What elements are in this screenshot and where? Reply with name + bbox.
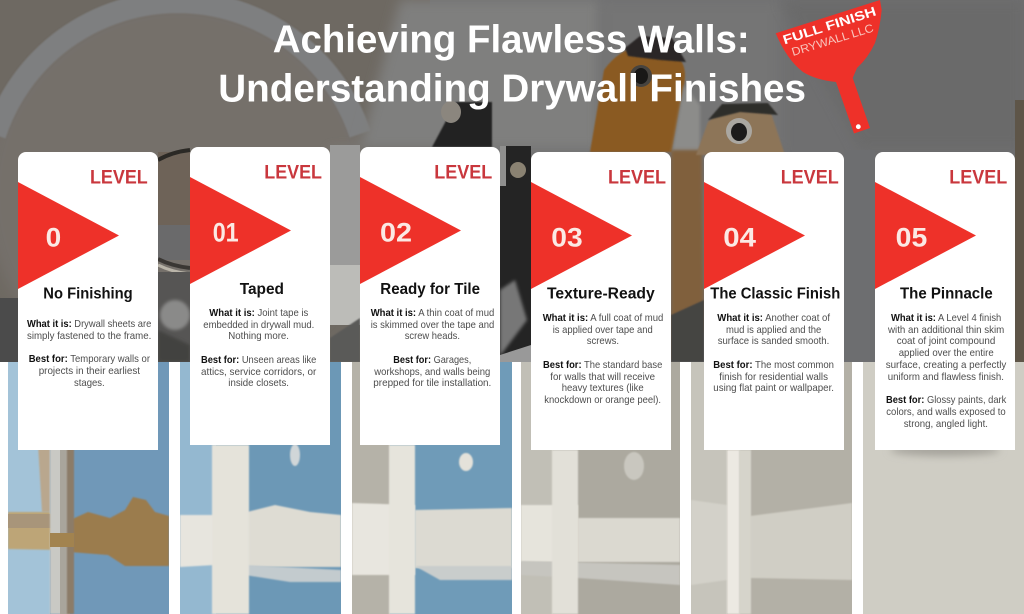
title (218, 18, 806, 111)
level label: LEVEL (90, 168, 148, 189)
description: is skimmed over the tape and (371, 320, 494, 331)
panel: level 03 (531, 152, 671, 450)
description: heavy textures (like (562, 383, 644, 394)
panel: level 0 (18, 152, 158, 450)
level number: 02 (380, 218, 412, 248)
logo: Full Finish Drywall trowel (776, 0, 882, 134)
black trowel handle (432, 102, 492, 147)
logo: Full Finish Drywall trowel: FULL FINISH (781, 4, 878, 47)
panel: level 01 (190, 147, 330, 445)
level label: LEVEL (781, 168, 839, 189)
level number: 0 (46, 223, 61, 253)
description (713, 313, 834, 394)
red triangle (360, 177, 461, 284)
description: uniform and flawless finish. (888, 372, 1004, 383)
description (886, 313, 1007, 430)
description: What it is: A thin coat of mud (371, 308, 494, 319)
photo strip: level 2 ready for tile (352, 362, 512, 614)
description: finish for residential walls (719, 372, 828, 383)
level label: LEVEL (434, 163, 493, 184)
description: for walls that will receive (550, 372, 655, 383)
description: using flat paint or wallpaper. (713, 383, 834, 394)
description (201, 308, 317, 389)
description: workshops, and walls being (373, 367, 490, 378)
level number: 04 (723, 223, 756, 253)
photo strip: level 1 taped (180, 362, 341, 614)
level number: 03 (551, 223, 583, 253)
level label: LEVEL (949, 168, 1008, 189)
photo strip: level 0 bare drywall (8, 362, 169, 614)
description: What it is: Joint tape is (209, 308, 308, 319)
heading: Texture-Ready (547, 286, 655, 302)
description: What it is: Drywall sheets are (27, 319, 151, 330)
level label: LEVEL (608, 168, 666, 189)
level number: 01 (213, 218, 239, 248)
description: attics, service corridors, or (201, 367, 317, 378)
panel: level 02 (360, 147, 500, 445)
red triangle (875, 182, 976, 289)
description: surface, creating a perfectly (886, 360, 1007, 371)
red triangle (531, 182, 632, 289)
description: screws. (587, 336, 619, 347)
description: Nothing more. (228, 331, 289, 342)
description: Best for: Temporary walls or (29, 354, 150, 365)
description: projects in their earliest (39, 366, 140, 377)
description: Best for: The standard base (543, 360, 662, 371)
description: coat of joint compound (897, 336, 995, 347)
description: What it is: A Level 4 finish (891, 313, 1001, 324)
description: inside closets. (228, 378, 289, 389)
description: knockdown or orange peel). (544, 395, 661, 406)
photo strip: level 4 classic finish (691, 362, 852, 614)
description: What it is: Another coat of (717, 313, 830, 324)
heading: The Pinnacle (900, 286, 993, 302)
level label: LEVEL (264, 163, 322, 184)
description: simply fastened to the frame. (27, 331, 151, 342)
description: stages. (74, 378, 105, 389)
heading: Ready for Tile (380, 281, 480, 298)
title: Achieving Flawless Walls: (273, 18, 750, 61)
description: What it is: A full coat of mud (543, 313, 663, 324)
description (371, 308, 494, 389)
description: Best for: Unseen areas like (201, 355, 316, 366)
photo strip: level 5 pinnacle (863, 362, 1024, 614)
description: colors, and walls exposed to (886, 407, 1006, 418)
description: mud is applied and the (726, 325, 821, 336)
description (27, 319, 151, 389)
description: is applied over tape and (553, 325, 653, 336)
description: prepped for tile installation. (373, 378, 491, 389)
description: Best for: The most common (713, 360, 834, 371)
photo strip: level 3 texture-ready (521, 362, 680, 614)
heading: No Finishing (43, 286, 133, 302)
panel: level 05 (875, 152, 1015, 456)
level number: 05 (896, 223, 927, 253)
heading: Taped (240, 281, 284, 298)
title: Understanding Drywall Finishes (218, 68, 806, 111)
red triangle (190, 177, 291, 284)
description: Best for: Garages, (393, 355, 471, 366)
description: surface is sanded smooth. (718, 336, 829, 347)
description: with an additional thin skim (887, 325, 1004, 336)
description: strong, angled light. (904, 419, 988, 430)
description (543, 313, 663, 406)
description: applied over the entire (899, 348, 994, 359)
description: screw heads. (405, 331, 460, 342)
panel: level 04 (704, 152, 844, 450)
background: tools and bucket photo (0, 0, 1024, 387)
red triangle (704, 182, 805, 289)
logo: Full Finish Drywall trowel: DRYWALL LLC (790, 23, 875, 59)
description: embedded in drywall mud. (203, 320, 314, 331)
description: Best for: Glossy paints, dark (886, 395, 1007, 406)
heading: The Classic Finish (710, 286, 840, 302)
red triangle (18, 182, 119, 289)
